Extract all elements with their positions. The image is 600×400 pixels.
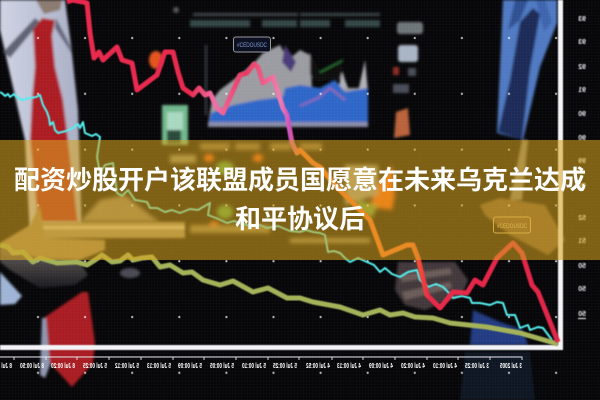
time axis: 3 Jul 00:25	[465, 363, 489, 370]
price axis: 92	[578, 64, 586, 71]
chart tag: lower	[494, 217, 530, 233]
chart tag: lower: #CEDOUSDC	[497, 224, 528, 230]
time axis: 5 Jul 00:13	[147, 363, 171, 370]
title	[14, 165, 586, 234]
time axis: 4 Jul 00:20	[401, 363, 425, 370]
time axis	[0, 357, 523, 370]
chart tag: top	[234, 37, 270, 52]
olive trend line	[0, 245, 558, 344]
price axis: 90	[578, 111, 586, 118]
time axis: 4 Jul 00:13	[337, 363, 361, 370]
time axis: 5 Jul 00:25	[83, 363, 107, 370]
right businessman	[395, 0, 565, 400]
colored screen details under the band	[80, 143, 395, 243]
time axis: 5 Jul 00:12	[115, 363, 139, 370]
monitor chart behind the line	[149, 7, 423, 145]
price axis: 90	[578, 135, 586, 142]
time axis: 4 Jul 00:10	[433, 363, 457, 370]
price axis: 51	[578, 238, 586, 245]
price axis: 50	[578, 263, 586, 270]
title: 和平协议后	[235, 204, 365, 234]
price axis: 93	[578, 16, 586, 23]
price axis: 50	[578, 286, 586, 293]
price axis: 99	[578, 183, 586, 190]
price axis: 52	[578, 215, 586, 222]
time axis: 8 Jul 00:20	[51, 363, 75, 370]
title: 配资炒股开户该联盟成员国愿意在未来乌克兰达成	[14, 165, 586, 195]
gold bar and left hand	[0, 205, 185, 260]
red price line	[67, 0, 558, 342]
time axis: 4 Jul 00:09	[369, 363, 393, 370]
price axis: 91	[578, 87, 586, 94]
chart tag: top: #CEDOUSDC	[237, 43, 268, 49]
time axis: 5 Jul 00:05	[210, 363, 234, 370]
price axis: 99	[578, 158, 586, 165]
title banner	[0, 140, 600, 260]
time axis: 8 Jul 00:50	[20, 363, 44, 370]
time axis: 5 Jul 00:25	[273, 363, 297, 370]
time axis: 5 Jul 00:09	[178, 363, 202, 370]
cyan price line	[0, 92, 552, 340]
price axis: 93	[578, 39, 586, 46]
time axis: 5 Jul 00:10	[242, 363, 266, 370]
time axis: 4 Jul 00:52	[306, 363, 330, 370]
price axis	[578, 16, 586, 319]
price axis: 50	[578, 311, 586, 318]
time axis: 3 Jul 2005	[500, 363, 522, 370]
left businessman	[0, 0, 140, 387]
